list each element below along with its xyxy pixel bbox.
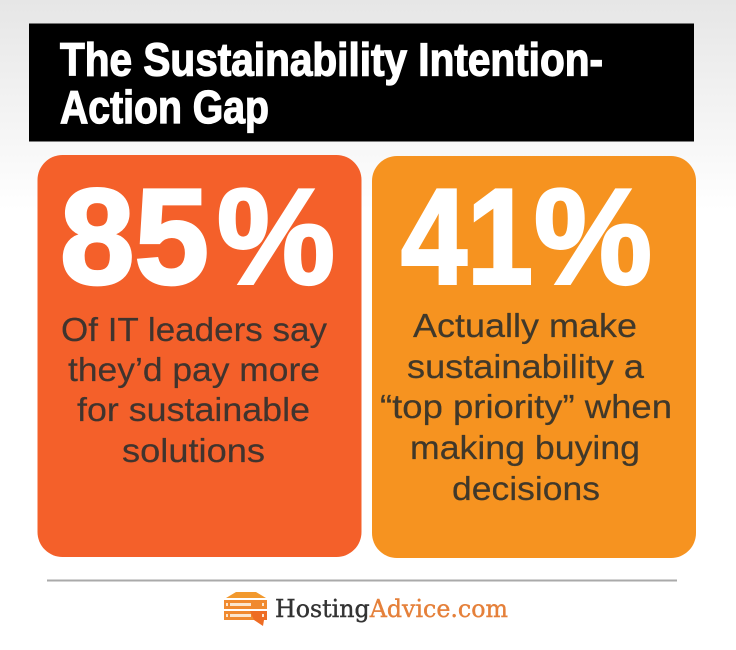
text: top priority: decisions xyxy=(452,470,600,507)
stat: 41%: 41 xyxy=(401,160,533,312)
text: top priority: “top priority” when xyxy=(380,388,672,425)
title: The Sustainability Intention- xyxy=(60,34,603,86)
text: IT leaders: Of IT leaders say xyxy=(61,311,328,348)
stat: 85%: % xyxy=(217,160,335,312)
icon: server speech bubble xyxy=(224,592,267,626)
title: Action Gap xyxy=(60,81,269,133)
panel: 41 percent xyxy=(372,156,696,558)
stat: 41%: % xyxy=(534,160,652,312)
logo: HostingAdvice xyxy=(224,592,508,626)
text: top priority: Actually make xyxy=(413,307,637,344)
title banner xyxy=(29,24,694,142)
panel: 85 percent xyxy=(38,155,362,557)
text: IT leaders: for sustainable xyxy=(77,391,310,428)
text: top priority: sustainability a xyxy=(407,348,645,385)
text: IT leaders: solutions xyxy=(122,432,265,469)
stat: 85%: 85 xyxy=(60,160,209,312)
wordmark: HostingAdvice.com xyxy=(275,595,508,623)
text: top priority: making buying xyxy=(410,429,640,466)
text: IT leaders: they’d pay more xyxy=(68,351,320,388)
